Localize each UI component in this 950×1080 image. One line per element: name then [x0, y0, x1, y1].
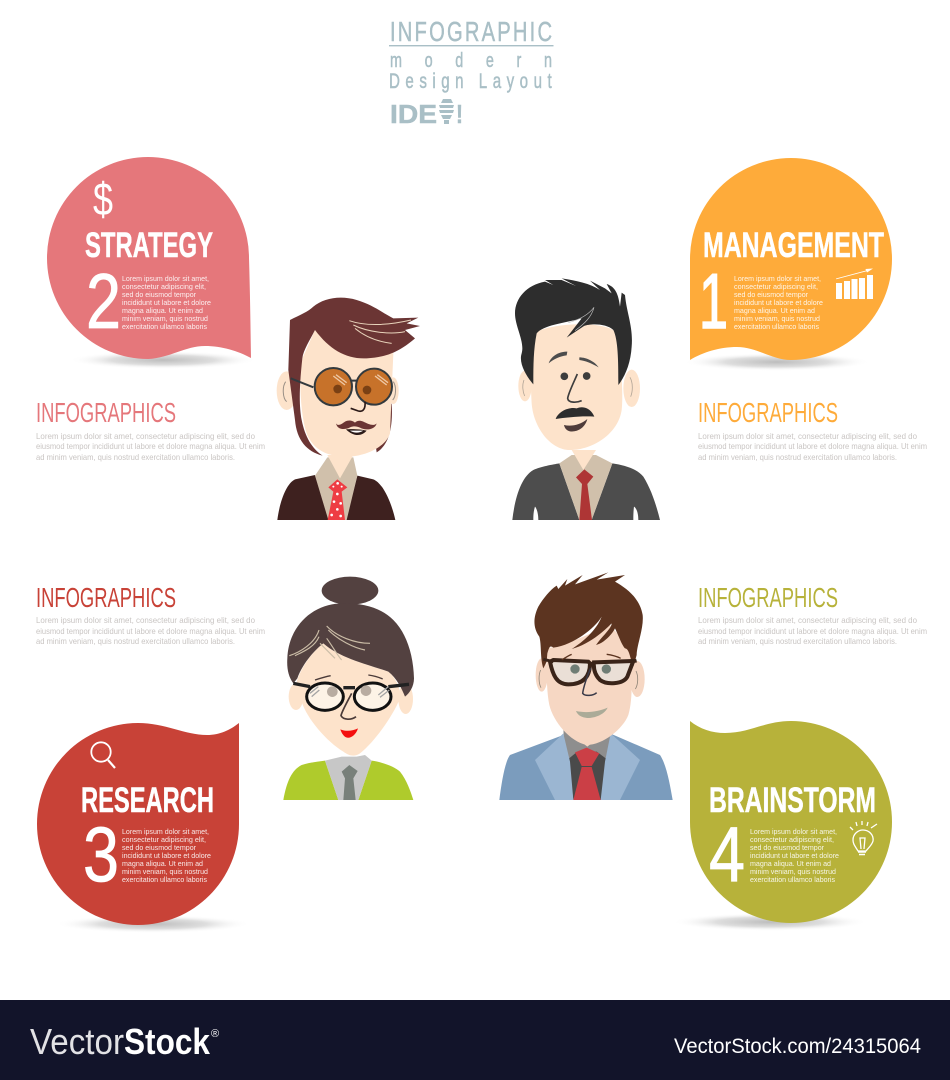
heading: strategy: STRATEGY	[85, 226, 213, 265]
idea logo: !	[456, 99, 463, 129]
header title block	[389, 17, 554, 129]
footer logo	[30, 1021, 219, 1062]
icon: magnifier	[91, 742, 115, 768]
text block: infographics research: INFOGRAPHICS	[36, 582, 176, 613]
text block: exercitation ullamco laboris	[734, 322, 819, 331]
text block: magna aliqua. Ut enim ad	[122, 859, 203, 868]
text block: minim veniam, quis nostrud	[122, 867, 208, 876]
text block: infographics research: eiusmod tempor incididunt ut labore et dolore magna aliqua. Ut enim	[36, 626, 265, 636]
heading: infographic: INFOGRAPHIC	[390, 17, 552, 48]
character: man with sunglasses	[277, 298, 420, 520]
text block: Lorem ipsum dolor sit amet,	[122, 827, 209, 836]
number 1: 1	[699, 257, 728, 345]
icon: dollar: $	[93, 173, 113, 225]
text block: minim veniam, quis nostrud	[750, 867, 836, 876]
text block: sed do eiusmod tempor	[122, 290, 197, 299]
text block: infographics research: Lorem ipsum dolor sit amet, consectetur adipiscing elit, sed do	[36, 615, 255, 625]
text block: exercitation ullamco laboris	[122, 322, 207, 331]
text block: consectetur adipiscing elit,	[734, 282, 818, 291]
text block: incididunt ut labore et dolore	[122, 298, 211, 307]
heading: brainstorm: BRAINSTORM	[709, 781, 876, 820]
text block: sed do eiusmod tempor	[734, 290, 809, 299]
text block: magna aliqua. Ut enim ad	[122, 306, 203, 315]
text block	[122, 827, 211, 884]
character: man with brown hair	[499, 572, 673, 800]
text block: consectetur adipiscing elit,	[750, 835, 834, 844]
text block: exercitation ullamco laboris	[122, 875, 207, 884]
text block: incididunt ut labore et dolore	[734, 298, 823, 307]
text block: Lorem ipsum dolor sit amet,	[734, 274, 821, 283]
panel: management bubble	[683, 158, 892, 371]
text block: infographics research: ad minim veniam, quis nostrud exercitation ullamco laboris.	[36, 636, 235, 646]
panel: strategy bubble	[47, 157, 257, 369]
heading: research: RESEARCH	[81, 781, 214, 820]
text block: infographics management: Lorem ipsum dolor sit amet, consectetur adipiscing elit, sed do	[698, 431, 917, 441]
text block	[122, 274, 211, 331]
text block: magna aliqua. Ut enim ad	[734, 306, 815, 315]
text block: incididunt ut labore et dolore	[122, 851, 211, 860]
icon: light bulb	[850, 821, 877, 854]
number 4: 4	[709, 810, 745, 898]
text block: infographics management: ad minim veniam, quis nostrud exercitation ullamco laboris.	[698, 452, 897, 462]
text block: consectetur adipiscing elit,	[122, 835, 206, 844]
text block: Lorem ipsum dolor sit amet,	[122, 274, 209, 283]
character: woman with bun	[283, 577, 414, 800]
number 2: 2	[86, 257, 121, 345]
footer logo: ®	[211, 1028, 219, 1040]
footer bar	[0, 1000, 950, 1080]
text block: sed do eiusmod tempor	[750, 843, 825, 852]
text block: infographics brainstorm	[698, 582, 927, 646]
text block: magna aliqua. Ut enim ad	[750, 859, 831, 868]
text block: infographics strategy: Lorem ipsum dolor sit amet, consectetur adipiscing elit, sed do	[36, 431, 255, 441]
subheading: modern: modern	[390, 49, 552, 72]
text block: Lorem ipsum dolor sit amet,	[750, 827, 837, 836]
text block: incididunt ut labore et dolore	[750, 851, 839, 860]
idea logo: IDE	[390, 99, 437, 129]
text block: infographics management	[698, 397, 927, 462]
number 3: 3	[83, 810, 119, 898]
text block: infographics strategy: eiusmod tempor incididunt ut labore et dolore magna aliqua. Ut enim	[36, 441, 265, 451]
footer logo: Vector	[30, 1021, 124, 1062]
text block: infographics management: eiusmod tempor incididunt ut labore et dolore magna aliqua. Ut enim	[698, 441, 927, 451]
text block: infographics brainstorm: INFOGRAPHICS	[698, 582, 838, 613]
text block: sed do eiusmod tempor	[122, 843, 197, 852]
idea logo	[390, 99, 463, 129]
text block: infographics strategy: INFOGRAPHICS	[36, 397, 176, 428]
text block	[750, 827, 839, 884]
footer url: VectorStock.com/24315064	[674, 1035, 921, 1058]
panel: brainstorm bubble	[672, 721, 892, 931]
text block: infographics management: INFOGRAPHICS	[698, 397, 838, 428]
text block: infographics research	[36, 582, 265, 646]
subheading: design layout: Design Layout	[389, 68, 552, 93]
panel: research bubble	[37, 723, 251, 933]
text block: minim veniam, quis nostrud	[734, 314, 820, 323]
text block: infographics brainstorm: Lorem ipsum dolor sit amet, consectetur adipiscing elit, sed do	[698, 615, 917, 625]
footer logo: Stock	[124, 1021, 211, 1062]
text block: infographics strategy: ad minim veniam, quis nostrud exercitation ullamco laboris.	[36, 452, 235, 462]
text block: minim veniam, quis nostrud	[122, 314, 208, 323]
text block: infographics brainstorm: eiusmod tempor incididunt ut labore et dolore magna aliqua. Ut enim	[698, 626, 927, 636]
text block: infographics brainstorm: ad minim veniam, quis nostrud exercitation ullamco laboris.	[698, 636, 897, 646]
text block: exercitation ullamco laboris	[750, 875, 835, 884]
text block	[734, 274, 823, 331]
text block: consectetur adipiscing elit,	[122, 282, 206, 291]
text block: infographics strategy	[36, 397, 265, 462]
icon: bar chart with arrow	[836, 268, 873, 299]
character: man with moustache	[512, 278, 660, 520]
